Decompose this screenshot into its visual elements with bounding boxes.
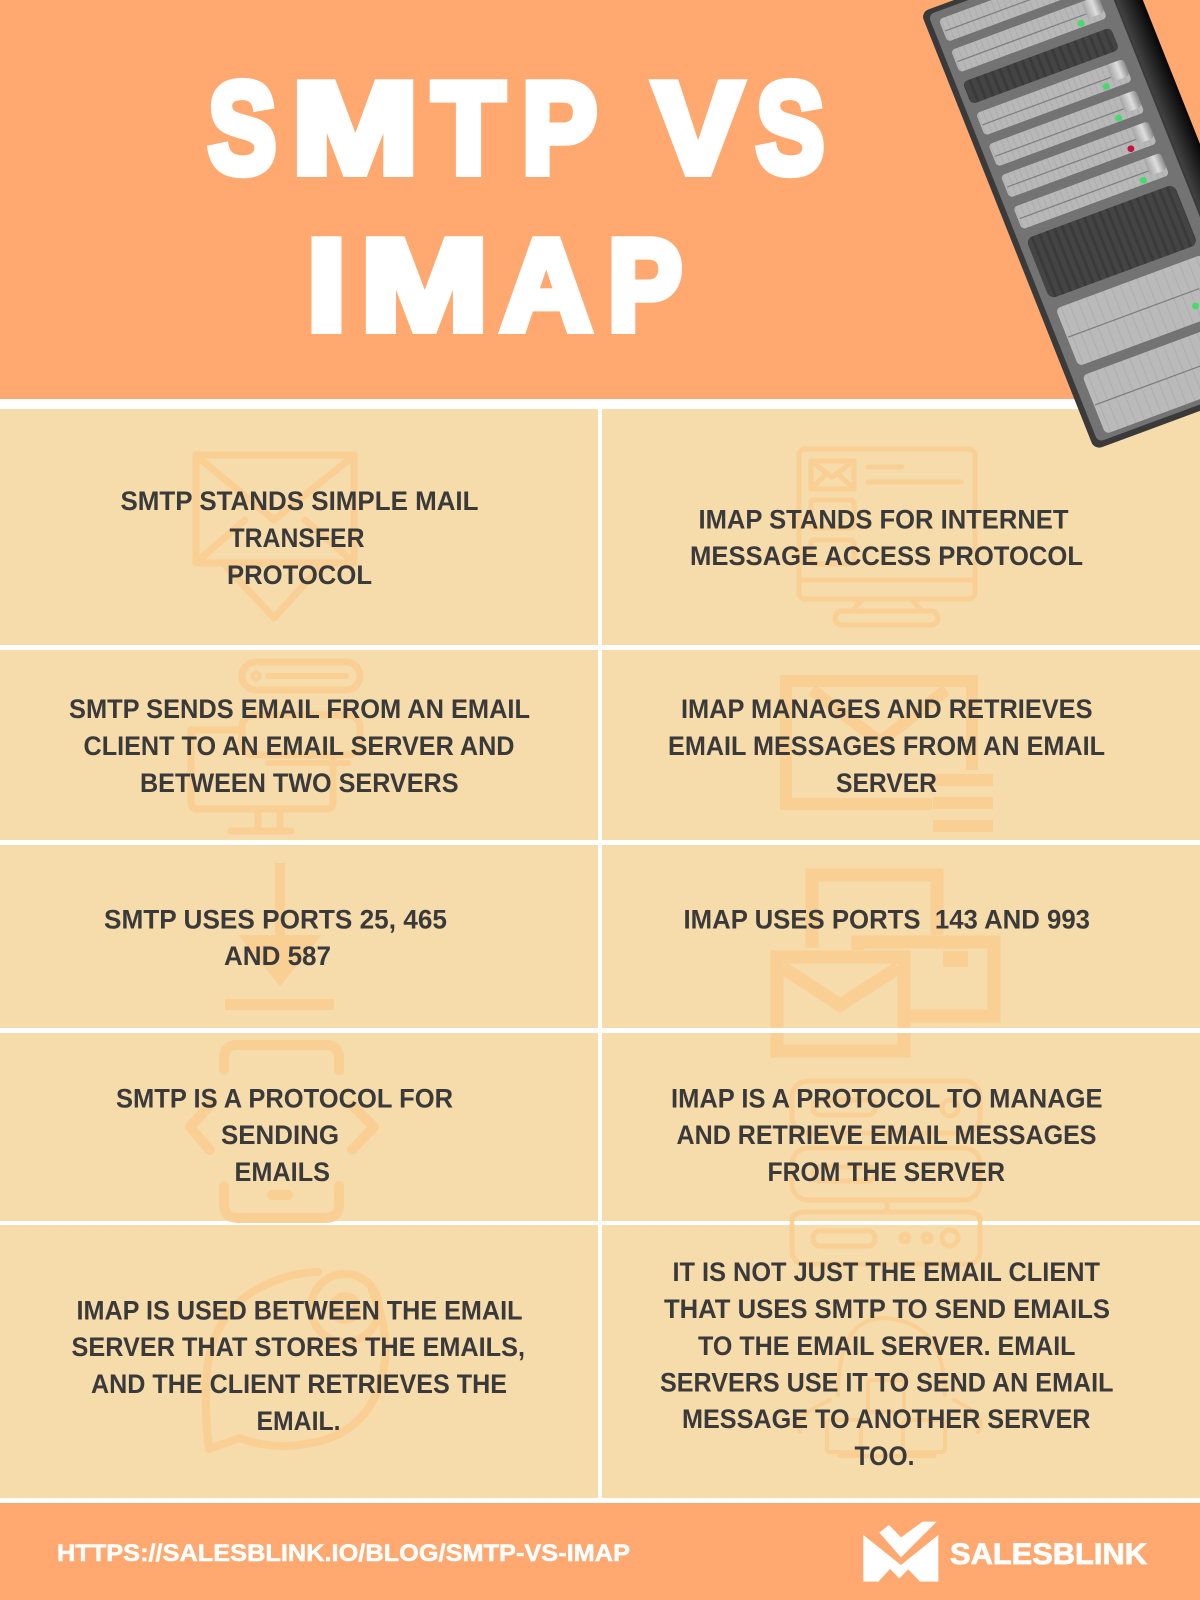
text: SMTP ports: AND 587 [224, 941, 331, 971]
server slot 1 [939, 0, 1095, 42]
text: SMTP servers note: TOO. [854, 1441, 914, 1471]
large server unit 1 [1056, 255, 1200, 366]
dark vent 2 [1026, 184, 1198, 299]
icon: phone with code brackets [190, 1045, 374, 1218]
text: IMAP usage [72, 1296, 525, 1436]
text: IMAP usage: AND THE CLIENT RETRIEVES THE [91, 1369, 507, 1399]
panel: row 2 right [602, 650, 1200, 840]
footer url: HTTPS://SALESBLINK.IO/BLOG/SMTP-VS-IMAP [57, 1540, 630, 1567]
text: SMTP purpose [116, 1084, 453, 1187]
icon: cloud network [798, 1318, 981, 1456]
icon: download arrow [225, 863, 334, 1010]
text: SMTP purpose: SMTP IS A PROTOCOL FOR [116, 1084, 453, 1114]
icon: mail with lines [786, 681, 993, 826]
text: IMAP function [668, 694, 1105, 798]
text: SMTP servers note: THAT USES SMTP TO SEND EMAILS [664, 1294, 1110, 1324]
text: IMAP function: SERVER [836, 768, 937, 798]
text: SMTP ports [104, 904, 447, 971]
title: P [522, 56, 595, 200]
text: IMAP definition [690, 504, 1083, 571]
header band [0, 0, 1200, 399]
panel: row 3 right [602, 845, 1200, 1028]
text: SMTP definition: TRANSFER [230, 523, 364, 553]
panel: row 5 left [0, 1225, 598, 1498]
title: S [756, 56, 824, 200]
text: SMTP definition: SMTP STANDS SIMPLE MAIL [120, 486, 478, 516]
icon: envelope download [196, 455, 354, 618]
text: SMTP servers note: MESSAGE TO ANOTHER SERVER [682, 1404, 1090, 1434]
text: IMAP usage: SERVER THAT STORES THE EMAILS, [72, 1332, 525, 1362]
panel: row 4 right [602, 1033, 1200, 1221]
server slot 5 with red light [1001, 121, 1157, 198]
text: SMTP definition: PROTOCOL [227, 560, 372, 590]
text: IMAP usage: IMAP IS USED BETWEEN THE EMAIL [76, 1296, 522, 1326]
text: SMTP servers note: SERVERS USE IT TO SEND AN EMAIL [660, 1368, 1114, 1398]
text: IMAP definition: MESSAGE ACCESS PROTOCOL [690, 541, 1083, 571]
large server unit 2 [1082, 321, 1200, 434]
panel: row 1 right [602, 409, 1200, 645]
text: IMAP purpose: IMAP IS A PROTOCOL TO MANAGE [671, 1084, 1102, 1114]
icon: envelope lower part [777, 1033, 904, 1051]
icon: server on monitor [191, 662, 360, 831]
panel: row 2 left [0, 650, 598, 840]
text: SMTP servers note [660, 1257, 1114, 1471]
text: SMTP ports: SMTP USES PORTS 25, 465 [104, 904, 447, 934]
title: M [292, 56, 418, 200]
title: M [361, 214, 488, 358]
panel: row 1 left [0, 409, 598, 645]
text: IMAP purpose: FROM THE SERVER [768, 1157, 1005, 1187]
text: IMAP definition: IMAP STANDS FOR INTERNET [698, 504, 1068, 534]
text: SMTP function: SMTP SENDS EMAIL FROM AN EMAIL [69, 694, 530, 724]
text: IMAP usage: EMAIL. [256, 1406, 340, 1436]
logo: SalesBlink mark [863, 1522, 938, 1582]
text: IMAP ports: IMAP USES PORTS 143 AND 993 [684, 904, 1090, 934]
title: V [654, 56, 742, 200]
title: S [208, 56, 276, 200]
text: SMTP purpose: SENDING [221, 1120, 339, 1150]
server slot 2 [951, 0, 1107, 72]
title: T [432, 56, 504, 200]
title [208, 56, 824, 358]
icon: stacked mail and pages [777, 875, 994, 1028]
logo: SalesBlink wordmark: SALESBLINK [950, 1538, 1147, 1571]
text: SMTP servers note: IT IS NOT JUST THE EMAIL CLIENT [672, 1257, 1100, 1287]
text: SMTP function: CLIENT TO AN EMAIL SERVER AND [84, 731, 514, 761]
panel: row 4 left [0, 1033, 598, 1221]
illustration: server rack [907, 0, 1200, 450]
title: P [608, 214, 682, 358]
icon: server lower unit [792, 1225, 980, 1264]
text: IMAP function: IMAP MANAGES AND RETRIEVES [681, 694, 1092, 724]
text: SMTP purpose: EMAILS [234, 1157, 330, 1187]
text: SMTP servers note: TO THE EMAIL SERVER. EMAIL [698, 1331, 1076, 1361]
icon: monitor with mail [799, 449, 975, 625]
footer band [0, 1503, 1200, 1600]
text: SMTP function: BETWEEN TWO SERVERS [140, 768, 458, 798]
text: SMTP definition [120, 486, 478, 590]
title: I [307, 214, 346, 358]
icon: server stack top [792, 1081, 980, 1221]
server slot 6 [1013, 153, 1169, 229]
text: IMAP purpose: AND RETRIEVE EMAIL MESSAGES [676, 1120, 1096, 1150]
server slot 3 [976, 59, 1132, 136]
text: IMAP function: EMAIL MESSAGES FROM AN EMAIL [668, 731, 1105, 761]
icon: chat bubble [206, 1272, 385, 1449]
text: SMTP function [69, 694, 530, 798]
title: A [501, 214, 592, 358]
text: IMAP purpose [671, 1084, 1102, 1187]
panel: row 5 right [602, 1225, 1200, 1498]
dark vent 1 [962, 27, 1119, 104]
panel: row 3 left [0, 845, 598, 1028]
server slot 4 [988, 90, 1144, 167]
